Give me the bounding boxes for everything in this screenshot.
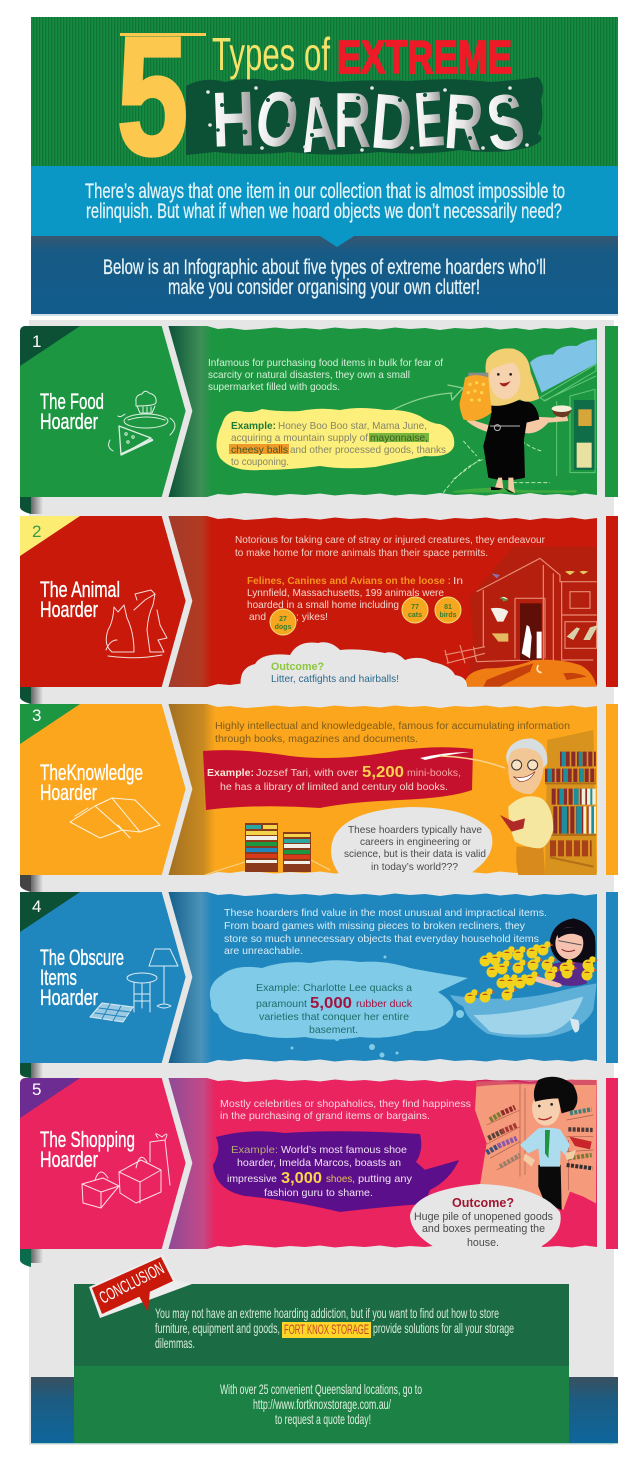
description [208,357,443,393]
conclusion panel: lower: With over 25 convenient Queensland locations, go to [220,1381,422,1397]
torn dark backdrop for HOARDERS [186,77,543,155]
title line: HOARDERS: H [210,74,256,164]
callout: red example banner [203,747,505,810]
callout: example: to couponing. [231,456,289,468]
callout: red example banner: 5,200 [362,764,404,781]
highlight: Fort Knox Storage: FORT KNOX STORAGE [284,1321,369,1337]
intro panel: dark blue [31,236,618,316]
callout: outcome cloud [241,642,467,688]
illustration: man and bookshelf [500,730,597,875]
heading [40,389,104,434]
description: Highly intellectual and knowledgeable, famous for accumulating information [215,720,570,732]
heading: Hoarder [40,597,98,622]
callout: speech bubble [331,807,492,875]
description: From board games with missing pieces to broken recliners, they [224,920,526,932]
description: supermarket filled with goods. [208,381,340,393]
callout: blue cloud [210,960,468,1040]
callout: purple example [213,1131,459,1212]
corner tag 3 [20,704,80,744]
badge: 77 cats [402,597,428,623]
example text [247,575,463,623]
description: scarcity or natural disasters, they own a small [208,369,410,381]
example text: Lynnfield, Massachusetts, 199 animals were [247,587,444,599]
description [235,534,545,559]
callout: outcome cloud: Outcome? [271,661,324,673]
callout: blue cloud: paramount [256,998,307,1010]
callout: example: Example: [231,420,276,432]
badge: 77 cats: cats [408,612,422,619]
arrow notch [320,236,354,247]
description: Notorious for taking care of stray or injured creatures, they endeavour [235,534,545,546]
number 4: 4 [32,897,41,916]
callout: purple example: putting any [358,1173,413,1185]
callout: blue cloud: varieties that conquer her entire [259,1011,409,1023]
description: are unreachable. [224,945,303,957]
number 1: 1 [32,332,41,351]
heading [40,1127,135,1172]
callout: red example banner: mini-books, [407,767,461,779]
title line: HOARDERS: E [412,74,447,164]
conclusion panel: upper: dilemmas. [155,1335,195,1351]
callout: example: Honey Boo Boo star, Mama June, [278,420,427,432]
description [220,1098,471,1122]
intro panel: blue [31,166,618,236]
big numeral 5: 5 [117,2,188,190]
conclusion panel: upper [74,1284,569,1366]
background band [29,320,614,1445]
heading: The Animal [40,577,120,602]
callout: speech bubble: careers in engineering or [360,836,471,848]
illustration: animal house [445,547,598,687]
illustration: book stacks [205,823,330,875]
number 3: 3 [32,706,41,725]
icon: books [70,798,160,838]
conclusion tag [89,1254,192,1318]
conclusion panel: lower: to request a quote today! [275,1411,371,1427]
conclusion panel: lower: http://www.fortknoxstorage.com.au/ [253,1396,391,1412]
callout: outcome oval: Outcome? [452,1196,514,1210]
panel 4: The Obscure Items Hoarder [20,890,618,1078]
title line: HOARDERS: O [249,72,305,166]
callout: purple example: Example: [231,1144,278,1156]
panel 5: The Shopping Hoarder [20,1076,618,1267]
title line: HOARDERS: R [442,77,486,167]
title line: EXTREME: EXTREME [337,31,512,83]
callout: outcome oval [410,1184,561,1250]
callout: blue cloud: basement. [309,1024,358,1036]
conclusion panel: lower [74,1366,569,1443]
callout: outcome oval: house. [467,1237,499,1249]
example text: hoarded in a small home including [247,599,399,611]
callout: outcome oval: Huge pile of unopened goods [414,1211,553,1223]
callout: blue cloud: rubber duck [356,998,413,1010]
callout: red example banner: Example: [207,767,254,779]
number 2: 2 [32,522,41,541]
callout: example: and other processed goods, thanks [290,444,446,456]
corner tag 2 [20,516,80,556]
description: store so much unnecessary objects that everyday household items [224,933,539,945]
badge: 77 cats: 77 [411,604,419,611]
heading: The Shopping [40,1127,135,1152]
badge: 81 birds: 81 [444,604,452,611]
callout: red example banner: Jozsef Tari, with over [256,767,359,779]
description: in the purchasing of grand items or bargains. [220,1110,430,1122]
callout: blue cloud: Example: Charlotte Lee quacks a [256,982,412,994]
callout: purple example: shoes, [326,1173,355,1185]
callout: example: mayonnaise, [370,432,428,444]
callout: purple example: World’s most famous shoe [281,1144,407,1156]
icon: food [109,391,175,455]
title line: HOARDERS: A [295,78,339,170]
description: to make home for more animals than their space permits. [235,547,488,559]
arrow to jar [387,385,463,413]
heading: Hoarder [40,985,98,1010]
heading: The Food [40,389,104,414]
example text: Felines, Canines and Avians on the loose : [247,575,451,587]
number 5: 5 [32,1080,41,1099]
panel 1: The Food Hoarder [20,324,618,514]
callout: speech bubble: science, but is their data is valid [344,848,486,860]
panel 2: The Animal Hoarder [20,514,618,704]
callout: example: cheesy balls [231,444,288,456]
highlight: Fort Knox Storage [282,1321,371,1338]
header banner [31,2,618,190]
description: Infamous for purchasing food items in bulk for fear of [208,357,443,369]
badge: 27 dogs: dogs [275,624,291,631]
illustration: woman in duck bath [450,918,598,1038]
heading: Hoarder [40,1147,98,1172]
callout: example [216,408,454,470]
callout: example: acquiring a mountain supply of [231,432,368,444]
description [215,720,570,745]
description: These hoarders find value in the most unusual and impractical items. [224,907,547,919]
footer band [31,1377,618,1443]
conclusion panel: upper: provide solutions for all your storage [373,1320,514,1336]
heading: Hoarder [40,409,98,434]
decorative bubbles [290,956,464,1058]
callout: purple example: fashion guru to shame. [264,1187,373,1199]
heading: TheKnowledge [40,760,143,785]
illustration: Mama June with jar [443,339,597,493]
panel 3: The Knowledge Hoarder [20,702,618,892]
conclusion panel: upper: furniture, equipment and goods, [155,1320,280,1336]
callout: red example banner: he has a library of limited and century old books. [220,781,448,793]
callout: speech bubble: in today’s world??? [371,861,458,873]
callout: blue cloud: 5,000 [310,995,352,1012]
icon: lamp stool and board [90,949,178,1022]
heading [40,945,124,1010]
heading: Items [40,965,77,990]
title line: HOARDERS: R [334,76,371,164]
badge: 81 birds [435,597,461,623]
callout: outcome cloud: Litter, catfights and hairballs! [271,673,399,685]
title line: Types of: Types of [212,28,330,80]
badge: 81 birds: birds [439,612,457,619]
illustration: Imelda Marcos and shoe shelves [475,1077,597,1210]
example text: ; yikes! [296,611,328,623]
badge: 27 dogs: 27 [279,616,287,623]
conclusion footer [31,1254,618,1444]
heading: The Obscure [40,945,124,970]
title line: HOARDERS: S [482,76,528,168]
callout: purple example: 3,000 [281,1170,322,1187]
icon: cat and dog [106,590,167,658]
description: Mostly celebrities or shopaholics, they find happiness [220,1098,471,1110]
corner tag 5 [20,1078,80,1118]
heading [40,577,120,622]
callout: purple example: hoarder, Imelda Marcos, boasts an [237,1157,401,1169]
heading: Hoarder [40,780,97,805]
intro panel: dark blue: make you consider organising your own clutter! [168,276,480,299]
title line: HOARDERS [206,72,529,170]
heading [40,760,143,805]
icon: gift boxes [82,1134,170,1208]
callout: outcome oval: and boxes permeating the [422,1223,545,1235]
example text: and [249,611,266,623]
callout: speech bubble: These hoarders typically have [348,824,482,836]
description: through books, magazines and documents. [215,733,418,745]
callout: purple example: impressive [227,1173,277,1185]
title line: HOARDERS: D [368,76,416,168]
example text: In [453,575,463,587]
corner tag 1 [20,326,80,366]
corner tag 4 [20,892,80,932]
conclusion tag: CONCLUSION [96,1259,167,1308]
badge: 27 dogs [270,609,296,635]
description [224,907,547,957]
